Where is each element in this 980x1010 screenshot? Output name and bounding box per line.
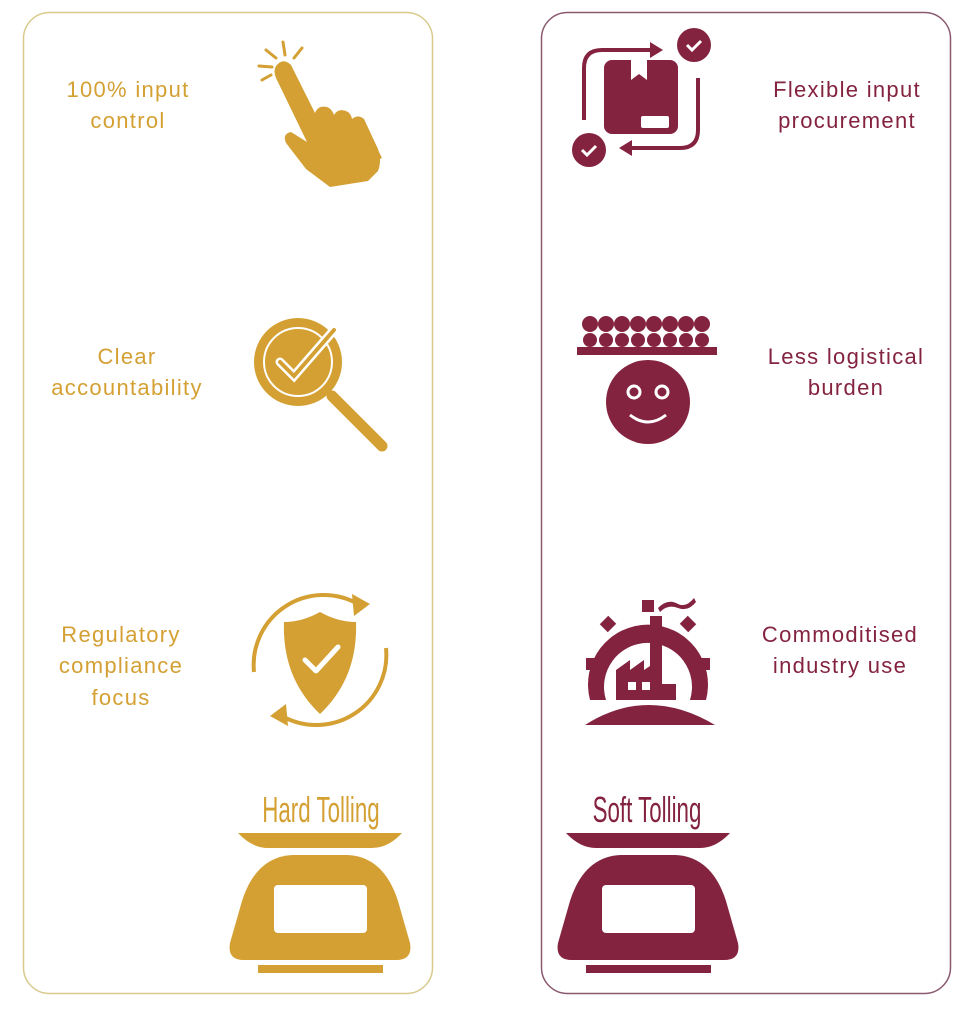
panel: hard tolling xyxy=(24,12,432,994)
text: Less logistical burden xyxy=(768,344,924,400)
text: Regulatory compliance focus: focus xyxy=(91,685,151,710)
text: Less logistical burden: Less logistical xyxy=(768,344,924,369)
text: 100% input control xyxy=(66,77,190,133)
icon: magnifier check xyxy=(254,318,382,446)
text: Flexible input procurement: Flexible input xyxy=(773,77,921,102)
text: Flexible input procurement xyxy=(773,77,921,133)
text: Regulatory compliance focus: compliance xyxy=(59,653,183,678)
icon: shield cycle xyxy=(254,594,386,726)
text: Less logistical burden: burden xyxy=(808,375,884,400)
text: Commoditised industry use: industry use xyxy=(773,653,907,678)
icon: smiley burden xyxy=(577,316,717,444)
icon: box exchange xyxy=(572,28,711,167)
icon: factory gear xyxy=(585,598,715,725)
text: 100% input control: control xyxy=(90,108,166,133)
text: Commoditised industry use xyxy=(762,622,918,678)
icon: hand pointer xyxy=(259,42,382,187)
text: Clear accountability: accountability xyxy=(51,375,203,400)
text: Regulatory compliance focus: Regulatory xyxy=(61,622,181,647)
text: Clear accountability xyxy=(51,344,203,400)
title: Soft Tolling: Soft Tolling xyxy=(593,791,701,830)
panel: soft tolling xyxy=(542,12,950,994)
text: Regulatory compliance focus xyxy=(59,622,183,710)
title: Hard Tolling: Hard Tolling xyxy=(262,791,380,830)
text: Commoditised industry use: Commoditised xyxy=(762,622,918,647)
text: Flexible input procurement: procurement xyxy=(778,108,916,133)
text: Clear accountability: Clear xyxy=(97,344,157,369)
text: 100% input control: 100% input xyxy=(66,77,190,102)
icon: scale gold xyxy=(230,833,410,973)
icon: scale maroon xyxy=(558,833,738,973)
